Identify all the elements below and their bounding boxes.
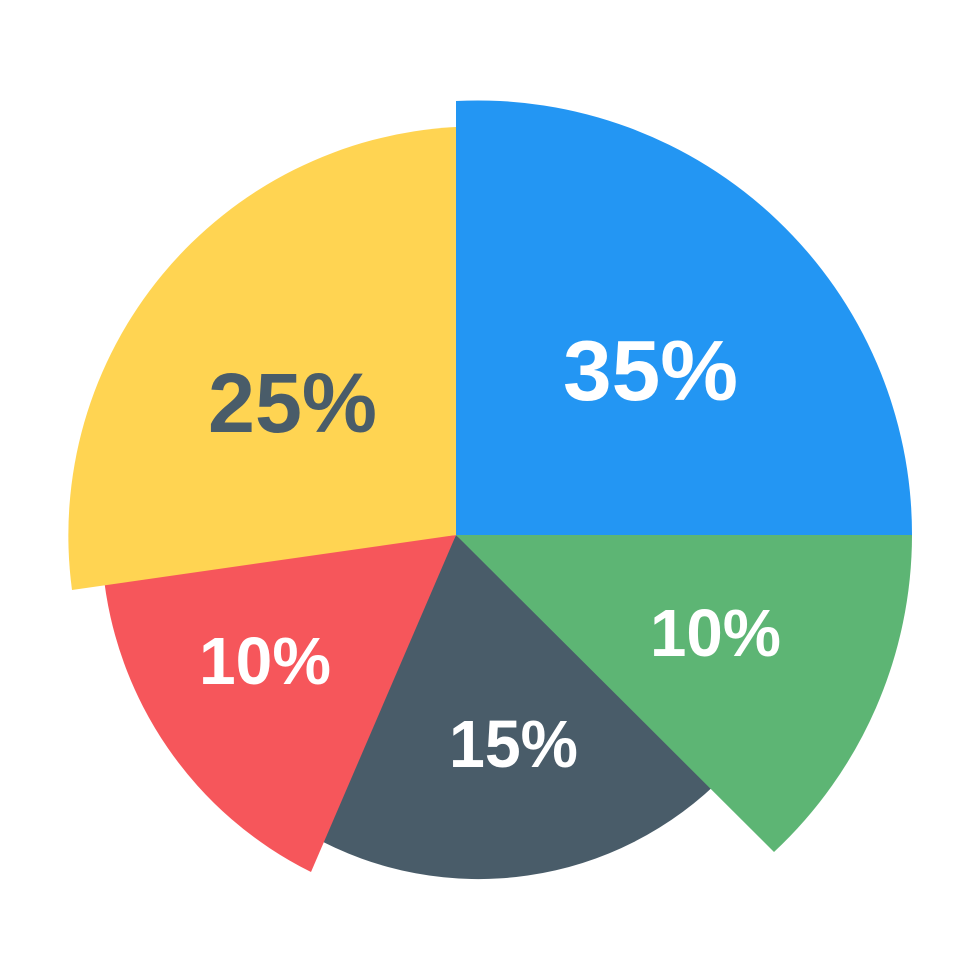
slice: blue 35%: 35% — [563, 324, 738, 419]
slice: green 10% — [456, 535, 912, 852]
slice: yellow 25%: 25% — [208, 356, 377, 450]
slice: blue 35% — [456, 100, 912, 535]
label: dark slice 15%: 15% — [449, 707, 578, 782]
slice: green 10%: 10% — [650, 596, 781, 671]
slice: red 10% — [103, 535, 456, 872]
slice: red 10%: 10% — [199, 624, 331, 699]
slice: yellow 25% — [68, 127, 456, 590]
slice: dark 15% — [310, 535, 725, 879]
